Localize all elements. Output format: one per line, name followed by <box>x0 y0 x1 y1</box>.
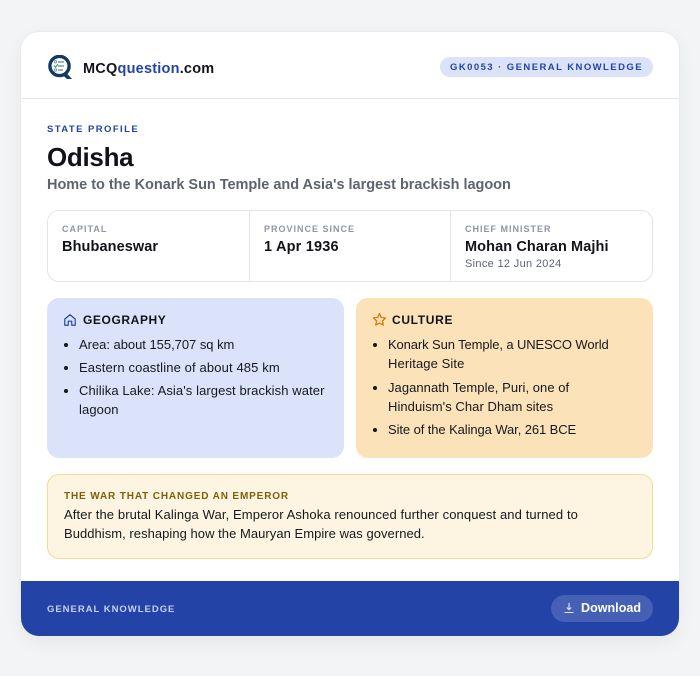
list: culture facts: Heritage Site <box>388 356 464 371</box>
list: culture facts: Hinduism's Char Dham sites <box>388 399 553 414</box>
panel: culture <box>356 298 653 458</box>
icon: download <box>564 603 574 613</box>
stat: chief minister: Mohan Charan Majhi <box>465 239 609 255</box>
button label: Download <box>581 601 641 615</box>
list: culture facts: Jagannath Temple, Puri, one of <box>388 380 569 395</box>
list: culture facts: Site of the Kalinga War, 261 BCE <box>388 422 576 437</box>
callout heading: THE WAR THAT CHANGED AN EMPEROR <box>64 491 289 502</box>
callout text: After the brutal Kalinga War, Emperor Ashoka renounced further conquest and turned to <box>64 507 578 522</box>
eyebrow: STATE PROFILE <box>47 124 139 135</box>
list: geography facts <box>64 337 325 417</box>
badge <box>440 57 653 77</box>
stat: chief minister <box>465 224 609 270</box>
stat: capital: Bhubaneswar <box>62 239 158 255</box>
footer <box>21 581 679 636</box>
stat: capital <box>48 211 250 281</box>
list: geography facts: Chilika Lake: Asia's largest brackish water <box>79 383 325 398</box>
download button <box>551 595 653 622</box>
header <box>21 32 679 99</box>
stat: province since <box>250 211 451 281</box>
logo text: MCQquestion.com <box>83 61 214 77</box>
list: culture facts: Konark Sun Temple, a UNESCO World <box>388 337 609 352</box>
badge: GK0053 · GENERAL KNOWLEDGE <box>450 62 643 73</box>
subtitle: Home to the Konark Sun Temple and Asia's largest brackish lagoon <box>47 177 511 193</box>
stat: capital: CAPITAL <box>62 224 107 234</box>
title: Odisha <box>47 142 133 172</box>
footer label: GENERAL KNOWLEDGE <box>47 604 175 615</box>
callout: Buddhism, reshaping how the Mauryan Empire was governed. <box>64 526 425 541</box>
stat: province since: PROVINCE SINCE <box>264 224 355 234</box>
callout <box>47 474 653 559</box>
icon: logo magnifier <box>48 55 72 79</box>
list: geography facts: Eastern coastline of about 485 km <box>79 360 280 375</box>
list: geography facts: Area: about 155,707 sq km <box>79 337 234 352</box>
stats panel <box>47 210 653 282</box>
stat: chief minister: Since 12 Jun 2024 <box>465 258 562 270</box>
heading: geography: GEOGRAPHY <box>83 313 166 327</box>
list: geography facts: lagoon <box>79 402 119 417</box>
icon: home <box>64 314 76 326</box>
stat: chief minister: CHIEF MINISTER <box>465 224 552 234</box>
panel: geography <box>47 298 344 458</box>
stat: province since: 1 Apr 1936 <box>264 239 339 255</box>
list: culture facts <box>373 337 609 437</box>
icon: star <box>372 312 386 326</box>
heading: culture: CULTURE <box>392 313 453 327</box>
